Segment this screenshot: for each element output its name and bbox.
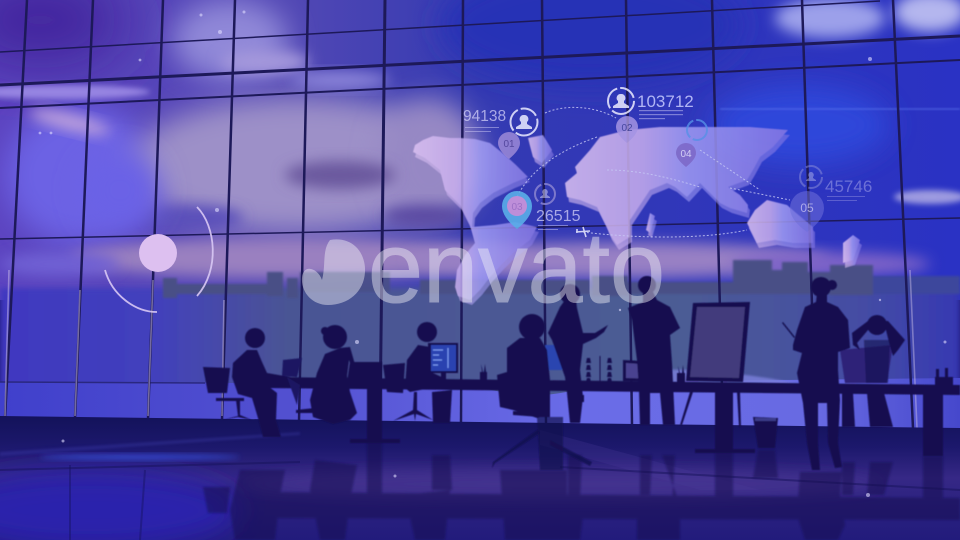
- standing woman with pointer: [782, 277, 850, 470]
- window frame: [0, 0, 960, 428]
- flipchart board: [680, 302, 750, 427]
- person icon rings: [510, 88, 822, 204]
- monitor: [428, 343, 458, 379]
- pin numbers: [503, 123, 814, 215]
- pin numbers: 01: [503, 139, 515, 150]
- standing person 6: [628, 276, 680, 425]
- pen cup left: [480, 364, 487, 380]
- laptop 1: [282, 358, 302, 405]
- forest and river below skyline: [0, 288, 960, 428]
- picture frame: [623, 360, 659, 382]
- chair and seated person 1: [203, 328, 290, 437]
- people and furniture silhouettes: [203, 276, 960, 470]
- river highlight: [640, 370, 800, 386]
- city skyline: [163, 260, 960, 298]
- table: [265, 377, 960, 395]
- dotted flight paths: [517, 107, 790, 237]
- numeric labels: [463, 92, 872, 225]
- pin numbers: 05: [800, 201, 814, 215]
- rack on table: [586, 356, 612, 382]
- envato leaf logo: [302, 239, 365, 305]
- screen of laptop 2: [545, 345, 562, 370]
- standing person 5: [548, 284, 608, 423]
- pin numbers: 02: [621, 123, 633, 134]
- airplane icon: [576, 227, 590, 237]
- world map hologram: [413, 88, 872, 305]
- table legs: [350, 380, 943, 456]
- pen cup right: [935, 368, 953, 385]
- clouds: [0, 0, 960, 278]
- wastebasket: [753, 417, 778, 448]
- floor light glow: [0, 430, 960, 540]
- seated person 3 with chair: [383, 322, 452, 423]
- location pins: [498, 116, 824, 232]
- person 8 chair back: [840, 345, 893, 383]
- water: [0, 378, 960, 430]
- floor: [0, 416, 960, 540]
- seated person 2: [296, 325, 382, 424]
- pen cup centre: [677, 365, 685, 382]
- numeric labels: 26515: [536, 208, 581, 225]
- envato watermark: [302, 212, 665, 324]
- seated person 4 with chair: [492, 314, 592, 470]
- mullion highlights: [5, 270, 917, 428]
- person 8 hands on head: [842, 315, 905, 427]
- left circular ornament: [105, 207, 213, 312]
- numeric labels: 103712: [637, 92, 694, 111]
- pin numbers: 04: [680, 149, 692, 160]
- person icons: [516, 94, 816, 198]
- tiny caption bars: [465, 110, 865, 230]
- sky background: [0, 0, 960, 300]
- continents: [413, 127, 860, 300]
- numeric labels: 45746: [825, 177, 872, 196]
- numeric labels: 94138: [463, 108, 506, 125]
- floor reflection of silhouettes: [203, 440, 960, 540]
- envato wordmark: envato: [368, 212, 665, 324]
- map hatched shadow: [415, 132, 862, 305]
- pin numbers: 03: [511, 202, 523, 213]
